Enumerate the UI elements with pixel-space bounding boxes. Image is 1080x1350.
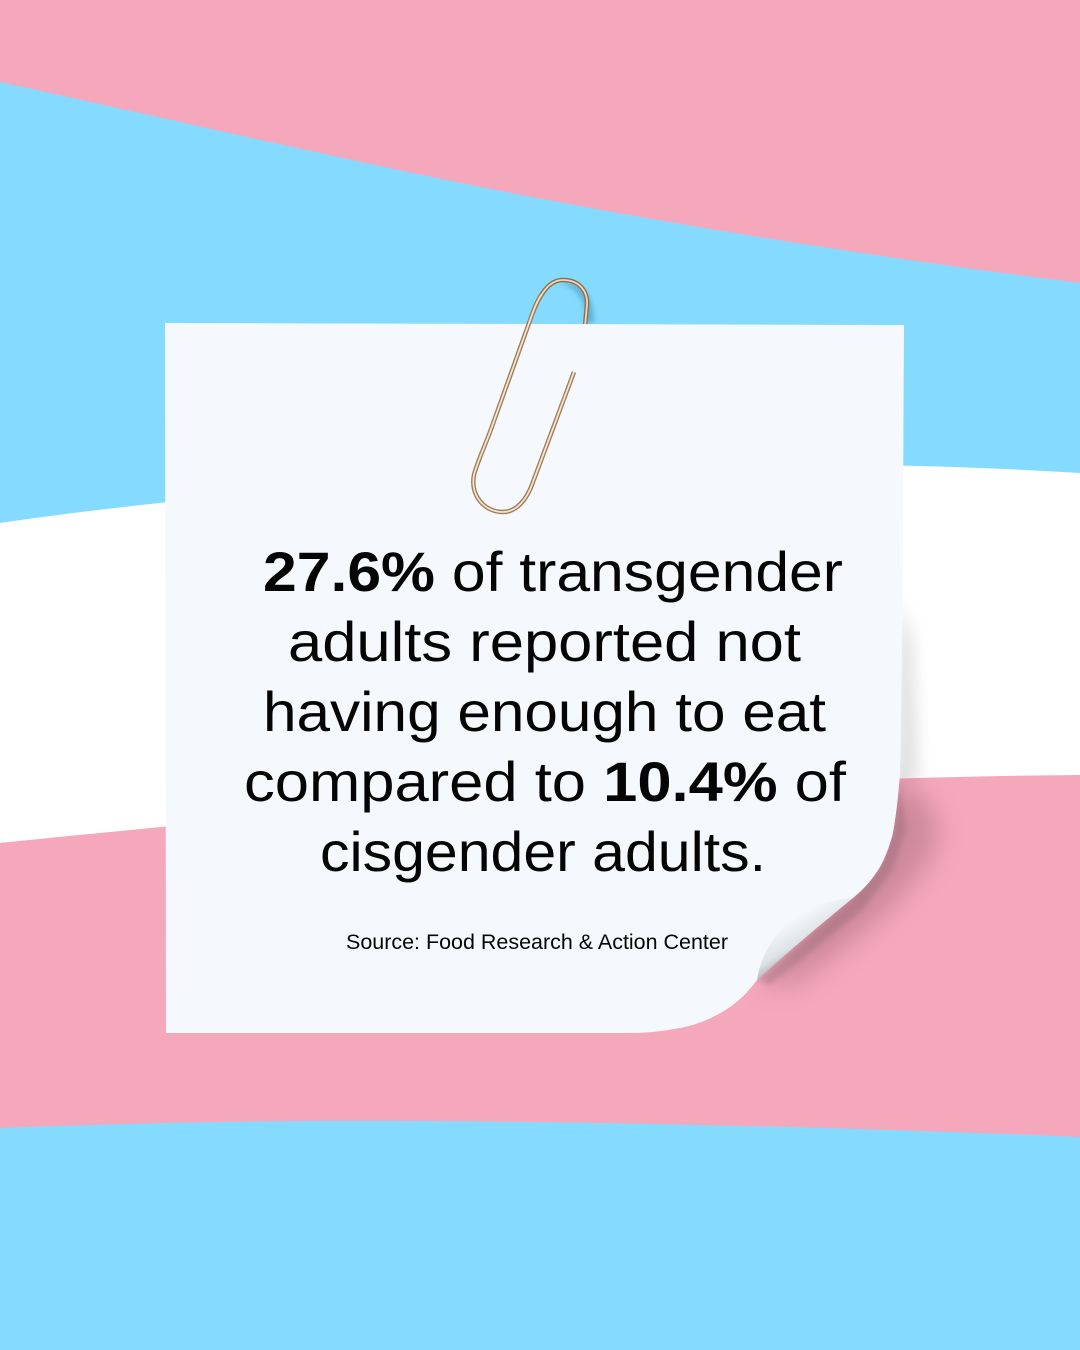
curled corner fold xyxy=(757,898,853,980)
background: top pink stripe xyxy=(0,0,1080,283)
source line: Source: Food Research & Action Center xyxy=(346,931,728,954)
line 2: adults reported not xyxy=(288,610,801,673)
line 1: 27.6% of transgender xyxy=(263,540,843,603)
note shadow xyxy=(757,600,938,990)
paperclip shadow on blue xyxy=(560,282,594,323)
sticky note paper xyxy=(165,323,904,1033)
paperclip back end behind note xyxy=(533,280,587,326)
background: white stripe xyxy=(0,465,1080,843)
line 5: cisgender adults. xyxy=(320,820,766,883)
paperclip xyxy=(473,294,574,512)
background: lower pink stripe xyxy=(0,775,1080,1137)
line 3: having enough to eat xyxy=(263,680,826,743)
main statistic text xyxy=(244,540,846,883)
line 4: compared to 10.4% of xyxy=(244,750,846,813)
